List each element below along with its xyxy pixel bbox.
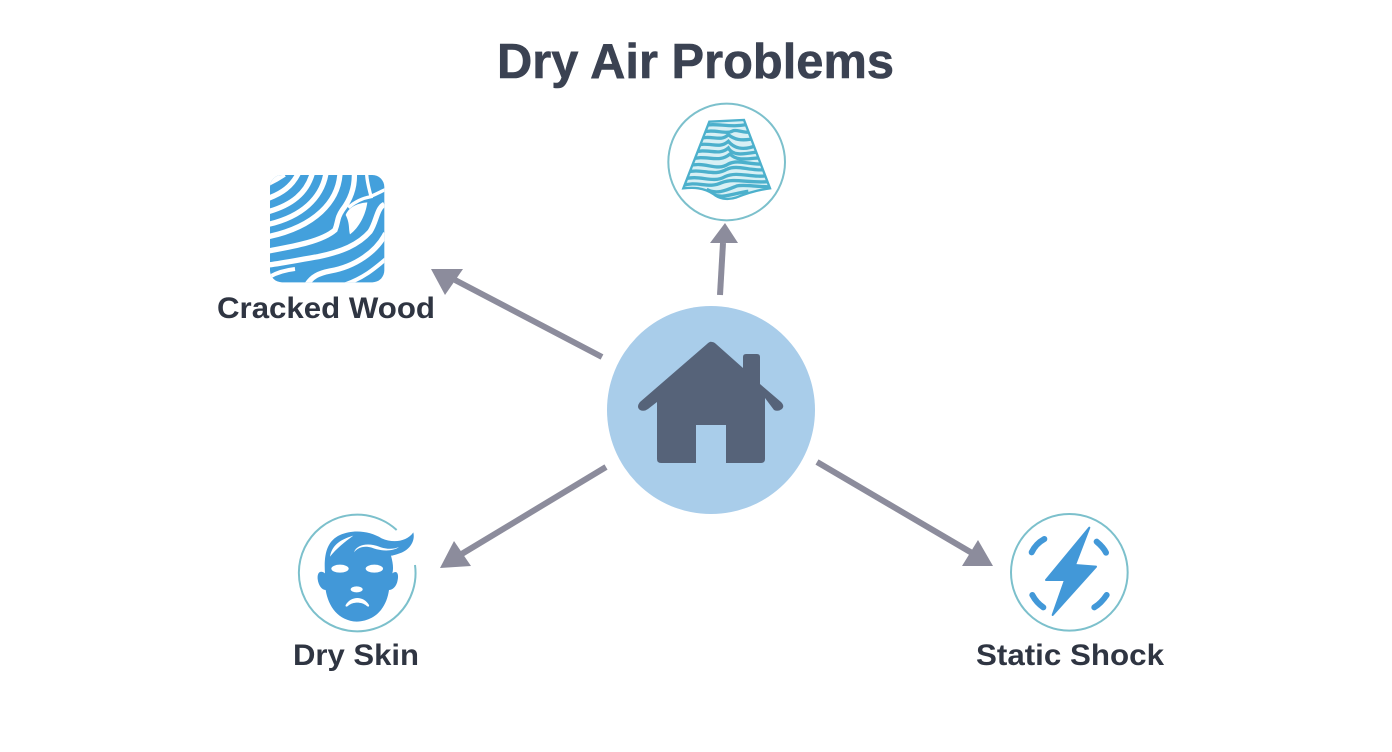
icon: dry skin face in circle bbox=[299, 515, 416, 631]
facial features bbox=[330, 536, 399, 607]
icon: house bbox=[638, 342, 783, 463]
arrow: to static shock bbox=[817, 462, 993, 566]
icon: static shock in circle bbox=[1011, 514, 1128, 631]
center circle with house bbox=[607, 306, 815, 514]
infographic bbox=[218, 42, 1164, 671]
icon: cracked wood bbox=[268, 173, 387, 285]
label: cracked wood: Cracked Wood bbox=[217, 292, 435, 325]
label: dry skin: Dry Skin bbox=[293, 639, 419, 672]
title: Dry Air Problems bbox=[497, 35, 894, 89]
arrow: to dry fabric icon bbox=[710, 223, 738, 295]
arrow: to dry skin bbox=[440, 467, 606, 568]
icon: dry fabric in circle bbox=[668, 104, 785, 220]
arrow: to cracked wood bbox=[431, 269, 602, 357]
crack opening bbox=[346, 202, 367, 234]
static sparks bbox=[1032, 539, 1107, 607]
label: static shock: Static Shock bbox=[976, 639, 1164, 672]
face with hair bbox=[318, 531, 414, 622]
